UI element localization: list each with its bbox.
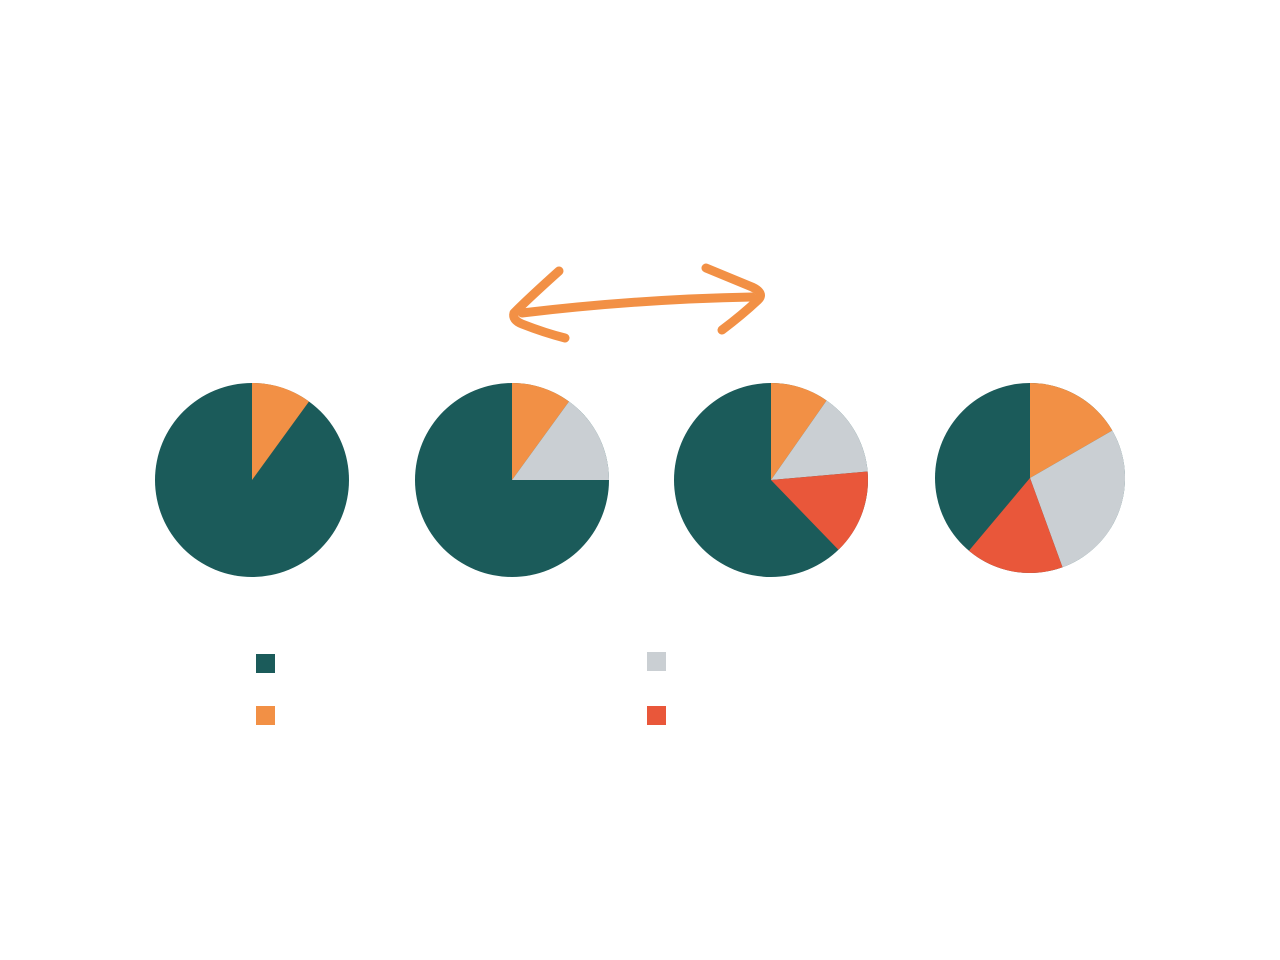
- legend swatch: gray: [647, 652, 666, 671]
- pie chart 4: [935, 383, 1125, 573]
- legend swatch: red: [647, 706, 666, 725]
- pie chart 1: [155, 383, 349, 577]
- legend swatch: teal: [256, 654, 275, 673]
- pie chart 2: [415, 383, 609, 577]
- pie chart 3: [674, 383, 868, 577]
- legend swatch: orange: [256, 706, 275, 725]
- legend: [256, 652, 666, 725]
- arrow: double-headed curved arrow: [514, 268, 760, 338]
